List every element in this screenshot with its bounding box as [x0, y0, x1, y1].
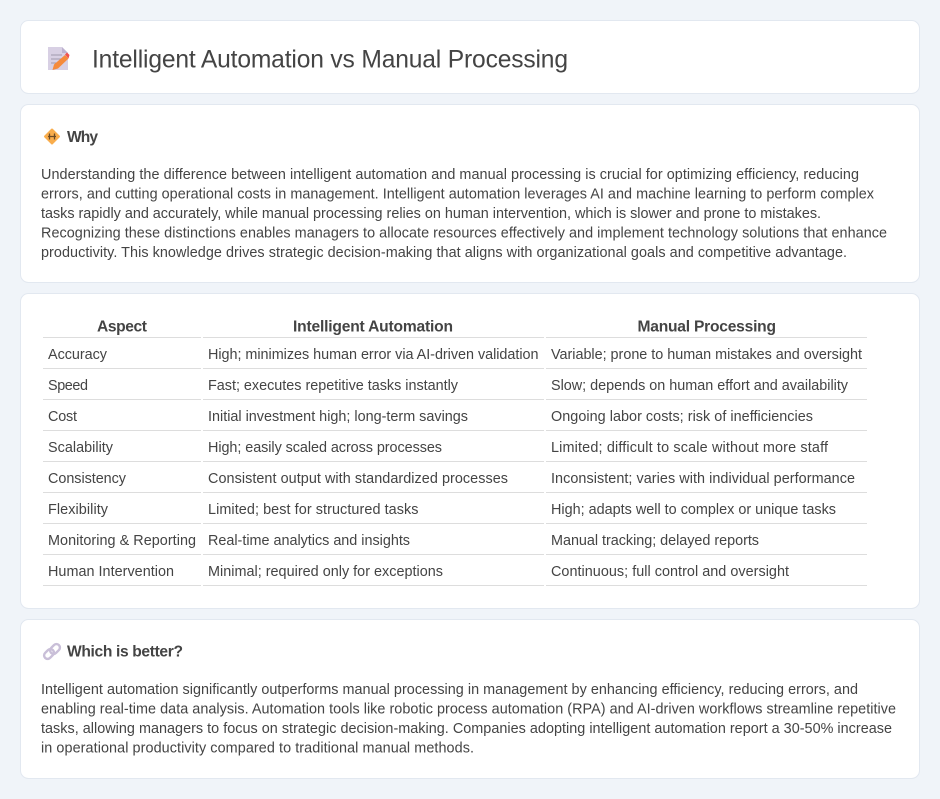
text block: which is better: in operational productivity compared to traditional manual methods.: [41, 741, 474, 757]
icon: memo with pencil: [48, 47, 70, 70]
table row: monitoring and reporting: Monitoring & Reporting: [48, 533, 196, 549]
text block: why: Recognizing these distinctions enables managers to allocate resources effectively and implement technology solutions that enhance: [41, 226, 887, 242]
table row: scalability: [48, 440, 829, 456]
table row: speed: Speed: [48, 378, 88, 394]
table row: human intervention: Human Intervention: [48, 564, 174, 580]
panel: which is better: [20, 620, 920, 778]
table row: cost: Initial investment high; long-term savings: [208, 409, 468, 425]
panel: comparison table: [20, 294, 920, 608]
heading: why: Why: [67, 129, 98, 146]
table row: cost: Cost: [48, 409, 77, 425]
text block: why: Understanding the difference between intelligent automation and manual processing is crucial for optimizing efficiency, reducing: [41, 167, 859, 183]
text block: why: productivity. This knowledge drives strategic decision-making that aligns with organizational goals and competitive advantage.: [41, 245, 847, 261]
table row: human intervention: Continuous; full control and oversight: [551, 564, 789, 580]
table row: accuracy: [48, 347, 862, 363]
table row: monitoring and reporting: [48, 533, 759, 549]
table row: speed: Fast; executes repetitive tasks instantly: [208, 378, 459, 394]
table header: [97, 318, 776, 336]
table row: speed: [48, 378, 849, 394]
table row: consistency: Consistent output with standardized processes: [208, 471, 508, 487]
text block: why: [41, 167, 887, 261]
table header: Intelligent Automation: [293, 318, 453, 336]
table row: accuracy: Variable; prone to human mistakes and oversight: [551, 347, 862, 363]
text block: which is better: Intelligent automation significantly outperforms manual processing in management by enhancing efficiency, reducing errors, and: [41, 682, 858, 698]
table row: monitoring and reporting: Manual tracking; delayed reports: [551, 533, 759, 549]
table row: scalability: Scalability: [48, 440, 114, 456]
panel: header: [20, 20, 920, 94]
text block: which is better: enabling real-time data analysis. Automation tools like robotic process automation (RPA) and AI-driven workflows streamline repetitive: [41, 702, 896, 718]
table row: cost: Ongoing labor costs; risk of inefficiencies: [551, 409, 813, 425]
table header: Aspect: [97, 318, 147, 336]
heading: which is better: Which is better?: [67, 644, 183, 660]
table row: consistency: Consistency: [48, 471, 127, 487]
table header: Manual Processing: [638, 318, 776, 336]
table row: scalability: Limited; difficult to scale without more staff: [551, 440, 829, 456]
panel: why: [20, 104, 920, 282]
table row: flexibility: High; adapts well to complex or unique tasks: [551, 502, 836, 518]
table row lines: [43, 337, 867, 586]
text block: which is better: tasks, allowing managers to focus on strategic decision-making. Companies adopting intelligent automation report a 30-50% increase: [41, 721, 892, 737]
table row: accuracy: High; minimizes human error via AI-driven validation: [208, 347, 538, 363]
text block: why: tasks rapidly and accurately, while manual processing relies on human intervention, which is slower and prone to mistakes.: [41, 206, 821, 222]
table row: accuracy: Accuracy: [48, 347, 108, 363]
table row: scalability: High; easily scaled across processes: [208, 440, 442, 456]
table row: consistency: Inconsistent; varies with individual performance: [551, 471, 855, 487]
table row: speed: Slow; depends on human effort and availability: [551, 378, 849, 394]
table row: cost: [48, 409, 813, 425]
table row: flexibility: Flexibility: [48, 502, 109, 518]
table row: monitoring and reporting: Real-time analytics and insights: [208, 533, 410, 549]
title: Intelligent Automation vs Manual Processing: [92, 46, 568, 74]
text block: why: errors, and cutting operational costs in management. Intelligent automation leverages AI and machine learning to perform complex: [41, 187, 875, 203]
icon: link: [43, 643, 61, 660]
table row: human intervention: [48, 564, 789, 580]
table row: flexibility: Limited; best for structured tasks: [208, 502, 418, 518]
icon: warning diamond: [45, 130, 59, 144]
text block: which is better: [41, 682, 896, 757]
table row: flexibility: [48, 502, 836, 518]
table row: consistency: [48, 471, 855, 487]
table row: human intervention: Minimal; required only for exceptions: [208, 564, 443, 580]
